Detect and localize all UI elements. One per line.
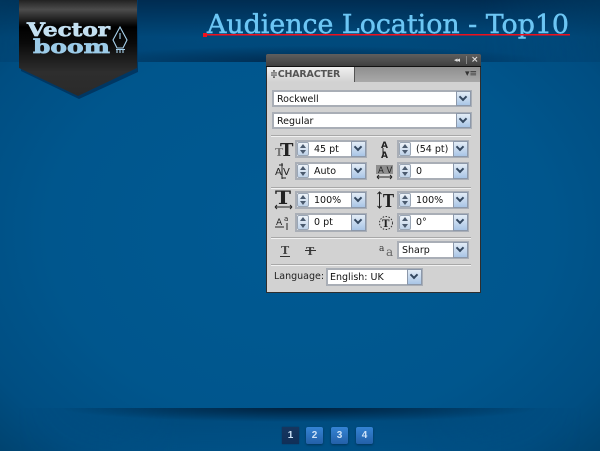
bottom band [106,408,494,436]
font style field [272,112,472,129]
logo text: boom [33,36,110,58]
icon: strikethrough: T [306,245,315,258]
page 1 active [282,427,299,444]
icon: tracking: A V [378,166,393,176]
horizontal scale field [295,191,367,209]
title: Audience Location - Top10 [206,10,569,40]
top band shadow [70,46,550,62]
page 2: 2 [312,430,317,441]
icon: baseline shift: a [284,215,288,223]
font size field: 45 pt [314,144,339,155]
panel title bar: ◂◂ [454,56,459,64]
logo text [26,19,111,58]
tracking field: 0 [416,166,422,177]
page 4 [356,427,373,444]
font family field [272,90,472,107]
icon: baseline shift: A [276,218,283,228]
page 2 [306,427,323,444]
icon: tracking [376,165,393,180]
tab: character: ≑CHARACTER [270,69,340,80]
font family field: Rockwell [277,94,319,105]
logo ribbon [19,0,138,99]
rotation field [397,213,469,232]
tracking field [397,162,469,180]
language field [326,268,423,286]
title underline [203,33,570,37]
icon: leading: A [381,151,388,161]
tab: character [267,67,355,82]
icon: anti-alias [379,244,393,259]
leading field: (54 pt) [416,144,448,155]
page 4: 4 [362,430,367,441]
logo text: Vector [26,19,111,41]
kerning field [295,162,367,180]
vertical scale field [397,191,469,209]
vertical scale field: 100% [416,195,443,206]
baseline shift field: 0 pt [314,217,333,228]
language label: Language: [274,271,324,282]
icon: horizontal scale: T [275,187,291,209]
ribbon shadow [21,0,138,99]
tab strip [267,67,480,82]
icon: vertical scale: T [383,191,394,212]
icon: anti-alias: a [386,245,393,259]
icon: rotation [379,216,393,230]
page 3: 3 [337,430,342,441]
kerning field: Auto [314,166,336,177]
bottom band shadow [60,408,540,422]
icon: underline: T [281,244,290,257]
icon: font size: T [275,146,284,159]
anti-alias field [397,241,469,259]
icon: leading: A [381,141,388,151]
baseline shift field [295,213,367,232]
horizontal scale field: 100% [314,195,341,206]
icon: pen nib [113,27,127,53]
icon: baseline shift [275,215,288,230]
rotation field: 0° [416,217,427,228]
top band shade [0,0,600,62]
leading field [397,140,469,158]
ribbon body [19,0,137,96]
icon: kerning [275,163,290,179]
icon: kerning: A [275,167,282,178]
icon: kerning: V [283,167,290,178]
icon: vertical scale [377,191,394,212]
icon: rotation: T [382,219,390,230]
panel body [266,54,481,293]
icon: leading [381,141,388,161]
page 3 [331,427,348,444]
pagination [282,426,374,446]
tab strip: ▾≡ [465,69,477,79]
anti-alias field: Sharp [402,245,430,256]
panel title bar: × [471,55,479,65]
language field: English: UK [330,272,384,283]
icon: anti-alias: a [379,244,385,254]
page 1 active: 1 [288,430,293,441]
panel title bar [266,54,481,67]
font style field: Regular [277,116,313,127]
font size field [295,140,367,158]
icon: font size: T [280,140,294,161]
